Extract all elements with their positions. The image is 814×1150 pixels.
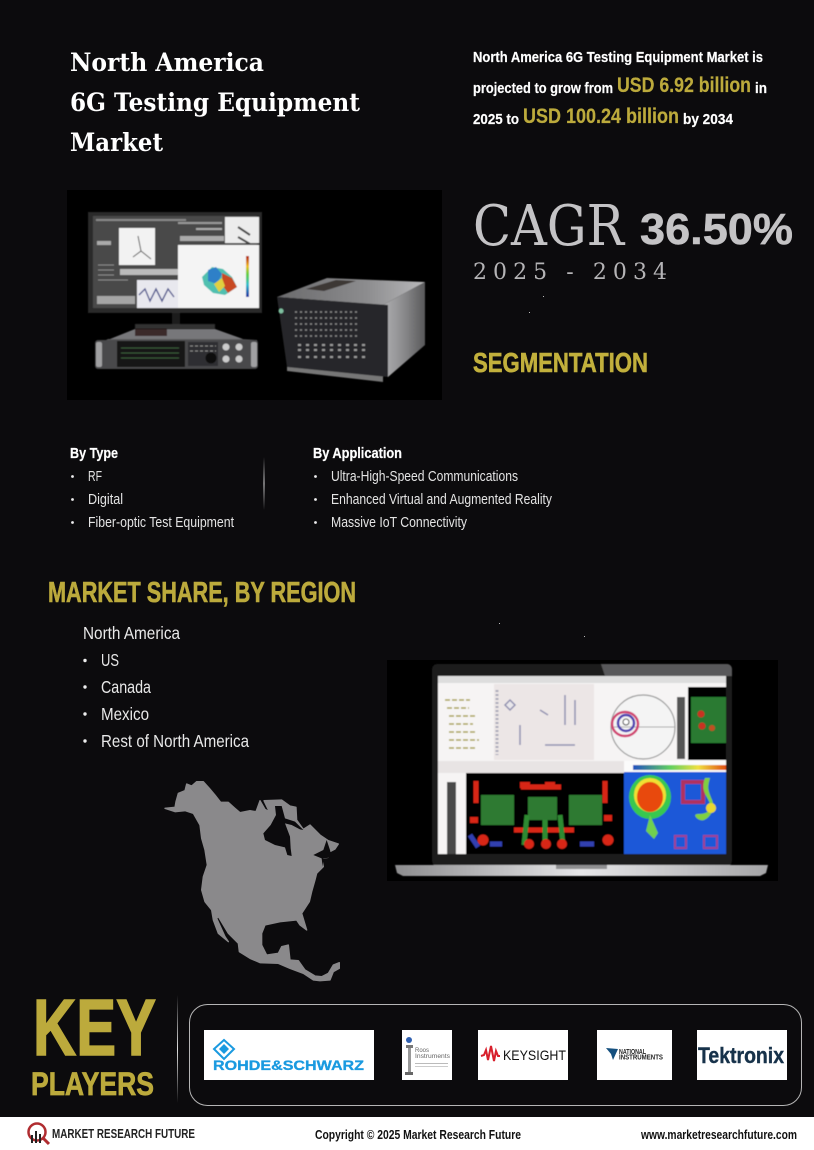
market summary text: USD 6.92 billion	[617, 74, 751, 97]
list: by application	[313, 446, 553, 531]
CAGR figure: CAGR	[473, 194, 626, 259]
specks	[499, 296, 585, 637]
heading: key players: KEY	[33, 983, 156, 1072]
map: North America	[165, 782, 339, 981]
market summary text: 2025 to	[473, 111, 519, 128]
panel: laptop with EDA software	[387, 660, 778, 881]
logo: National Instruments: INSTRUMENTS	[619, 1054, 663, 1062]
list: by application: Massive IoT Connectivity	[331, 515, 468, 531]
heading: segmentation: SEGMENTATION	[473, 347, 648, 378]
title	[70, 48, 360, 157]
CAGR figure	[473, 194, 793, 259]
heading: key players	[31, 983, 156, 1102]
logo: National Instruments: NATIONAL	[619, 1049, 647, 1056]
list: regions: Canada	[101, 677, 151, 697]
market summary text: North America 6G Testing Equipment Market is	[473, 49, 763, 66]
image: test chassis	[277, 278, 425, 382]
logo: Roos Instruments: Roos	[415, 1048, 429, 1054]
heading: market share by region: MARKET SHARE, BY REGION	[48, 577, 356, 609]
list: by type: Fiber-optic Test Equipment	[88, 515, 234, 531]
image: signal analyzer	[95, 329, 258, 369]
logo: Rohde & Schwarz	[204, 1030, 374, 1080]
market summary text: by 2034	[683, 111, 734, 128]
logo: Rohde & Schwarz: ROHDE&SCHWARZ	[213, 1058, 364, 1073]
logo: National Instruments	[597, 1030, 672, 1080]
list: by type: Digital	[88, 492, 123, 508]
image: laptop	[395, 664, 768, 876]
list: by application: By Application	[313, 446, 402, 462]
list: by type: RF	[88, 469, 102, 485]
title: 6G Testing Equipment	[70, 88, 360, 117]
logo: Market Research Future: MARKET RESEARCH FUTURE	[52, 1127, 195, 1141]
CAGR years: 2025 - 2034	[473, 260, 667, 285]
logo: Tektronix	[697, 1030, 787, 1080]
logo: Keysight: KEYSIGHT	[503, 1047, 566, 1063]
logo: Roos Instruments: Instruments	[415, 1054, 450, 1060]
copyright: Copyright © 2025 Market Research Future	[315, 1127, 521, 1142]
list: regions: Mexico	[101, 704, 149, 724]
market summary text: projected to grow from	[473, 80, 613, 97]
market summary text: USD 100.24 billion	[523, 105, 679, 128]
CAGR figure: 36.50%	[640, 205, 793, 254]
list: regions	[83, 623, 249, 751]
list: by type: By Type	[70, 446, 118, 462]
list: by application: Ultra-High-Speed Communications	[331, 469, 518, 485]
title: Market	[70, 128, 163, 157]
market summary text	[473, 49, 767, 128]
heading: key players: PLAYERS	[31, 1066, 154, 1102]
list: by type	[70, 446, 234, 531]
image: monitor	[88, 212, 262, 329]
list: by application: Enhanced Virtual and Augmented Reality	[331, 492, 553, 508]
logo: Tektronix: Tektronix	[698, 1043, 785, 1068]
logo: Keysight	[478, 1030, 568, 1080]
divider	[177, 995, 178, 1103]
panel: test equipment photo	[67, 190, 442, 400]
logo: Roos Instruments	[402, 1030, 452, 1080]
footer	[0, 1117, 814, 1150]
list: regions: Rest of North America	[101, 731, 249, 751]
market summary text: in	[755, 80, 767, 97]
divider	[264, 457, 265, 510]
list: regions: US	[101, 650, 119, 670]
title: North America	[70, 48, 264, 77]
logo: Market Research Future	[28, 1124, 195, 1144]
panel: key players	[190, 1004, 802, 1106]
list: regions: North America	[83, 623, 180, 643]
